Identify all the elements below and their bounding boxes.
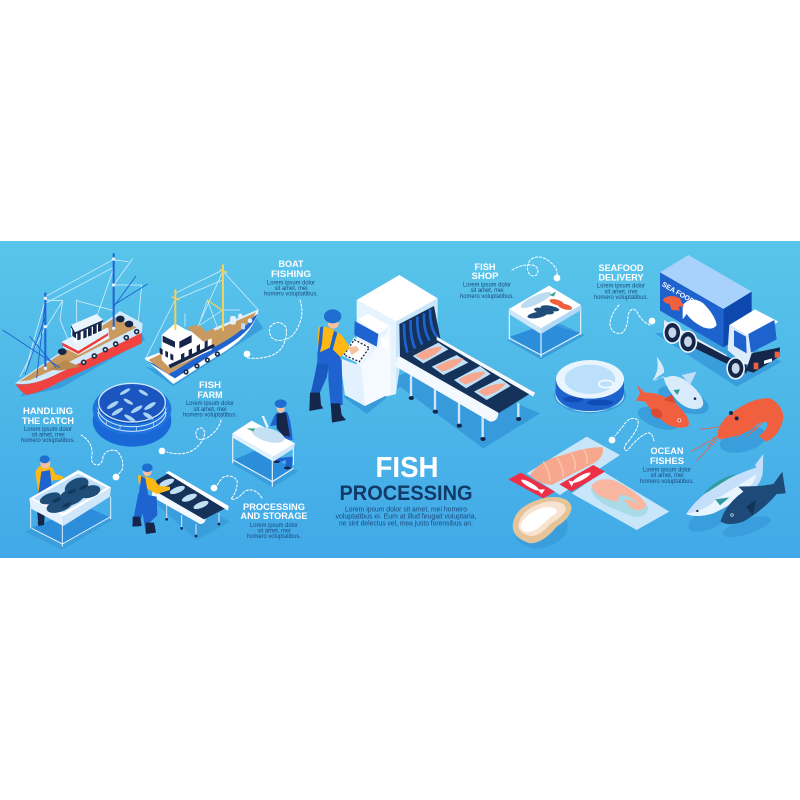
illustration: tin can	[554, 360, 626, 413]
label: fish shop	[460, 262, 514, 300]
label: handling the catch: homero voluptatibus.	[21, 437, 75, 444]
salmon trays on belt	[396, 337, 535, 422]
illustration: worker at fish conveyor	[132, 463, 230, 540]
illustration: fish shop display table	[507, 286, 585, 359]
label: fish shop: sit amet, mei	[470, 287, 504, 294]
label: fish shop: FISH	[474, 262, 496, 273]
label: handling the catch: HANDLING	[23, 406, 73, 417]
label: ocean fishes: sit amet, mei	[650, 472, 684, 479]
label: handling the catch: THE CATCH	[22, 416, 74, 427]
title: FISH	[376, 452, 438, 484]
label: fish farm	[183, 380, 237, 418]
label: fish farm: sit amet, mei	[194, 406, 226, 413]
label: boat fishing	[264, 259, 318, 298]
label: processing and storage: AND STORAGE	[240, 511, 308, 522]
label: fish farm: homero voluptatibus.	[183, 412, 237, 418]
label: boat fishing: homero voluptatibus.	[264, 290, 318, 298]
label: boat fishing: sit amet, mei	[274, 285, 308, 292]
label: processing and storage	[240, 502, 308, 540]
worker	[309, 309, 359, 423]
illustration: circular fish farm pen	[93, 383, 171, 447]
label: seafood delivery: sit amet, mei	[604, 288, 638, 296]
machine body	[357, 275, 440, 397]
illustration: oyster	[511, 497, 572, 554]
label: handling the catch: Lorem ipsum dolor	[24, 426, 72, 433]
illustration: worker cleaning fish at table	[232, 399, 298, 487]
label: fish shop: SHOP	[472, 271, 499, 282]
dashed route: ocean fishes	[609, 418, 654, 450]
label: seafood delivery: SEAFOOD	[598, 263, 644, 274]
label: processing and storage: PROCESSING	[243, 502, 305, 513]
illustration: fishing boat with red hull	[3, 253, 148, 397]
intro text: voluptatibus ei. Eum at illud feugait voluptaria,	[336, 514, 477, 520]
label: fish shop: homero voluptatibus.	[460, 293, 514, 300]
title: PROCESSING	[340, 482, 472, 505]
intro text: ne sint delectus vel, mea justo forensibus an.	[339, 520, 473, 528]
illustration: fishing boat with white cabin	[144, 264, 263, 386]
label: fish farm: FISH	[199, 380, 221, 391]
illustration: seafood delivery truck: SEA FOOD	[660, 281, 695, 306]
label: processing and storage: homero voluptatibus.	[247, 533, 301, 540]
label: processing and storage: Lorem ipsum dolor	[250, 522, 298, 529]
dashed route: processing and storage	[211, 476, 262, 499]
label: boat fishing: FISHING	[271, 269, 311, 280]
label: ocean fishes: FISHES	[650, 456, 685, 467]
label: seafood delivery: Lorem ipsum dolor	[597, 282, 645, 290]
intro text: Lorem ipsum dolor sit amet, mei homero	[345, 506, 467, 514]
label: ocean fishes: OCEAN	[650, 446, 684, 457]
dashed route: fish shop	[512, 257, 560, 281]
label: fish farm: Lorem ipsum dolor	[186, 400, 234, 407]
intro text	[336, 506, 477, 528]
label: processing and storage: sit amet, mei	[258, 528, 290, 534]
label: boat fishing: Lorem ipsum dolor	[267, 280, 315, 286]
label: fish shop: Lorem ipsum dolor	[463, 282, 511, 288]
label: seafood delivery: DELIVERY	[598, 273, 644, 284]
conveyor legs	[409, 375, 521, 441]
illustration: central conveyor machine with worker	[309, 275, 540, 448]
dashed route: seafood delivery	[610, 305, 655, 333]
background panel	[0, 241, 800, 558]
label: seafood delivery: homero voluptatibus.	[594, 294, 648, 301]
label: ocean fishes: Lorem ipsum dolor	[643, 466, 691, 474]
illustration: salmon packs	[508, 437, 669, 530]
machine shadow	[343, 360, 540, 448]
dashed route: fish farm	[159, 420, 221, 454]
label: fish farm: FARM	[198, 390, 222, 401]
illustration: ocean fishes and shrimp	[635, 357, 786, 541]
label: boat fishing: BOAT	[278, 259, 304, 270]
label: seafood delivery	[594, 263, 648, 301]
label: handling the catch: sit amet, mei	[32, 432, 64, 438]
label: ocean fishes: homero voluptatibus.	[640, 478, 694, 485]
dashed route: handling the catch	[81, 435, 123, 480]
label: handling the catch	[21, 406, 75, 444]
title	[340, 452, 472, 505]
dashed route: boat fishing	[244, 300, 302, 358]
illustration: worker at sorting table with catch	[25, 455, 113, 550]
illustration: seafood delivery truck	[655, 255, 782, 387]
control console	[340, 314, 391, 406]
label: ocean fishes	[640, 446, 694, 485]
